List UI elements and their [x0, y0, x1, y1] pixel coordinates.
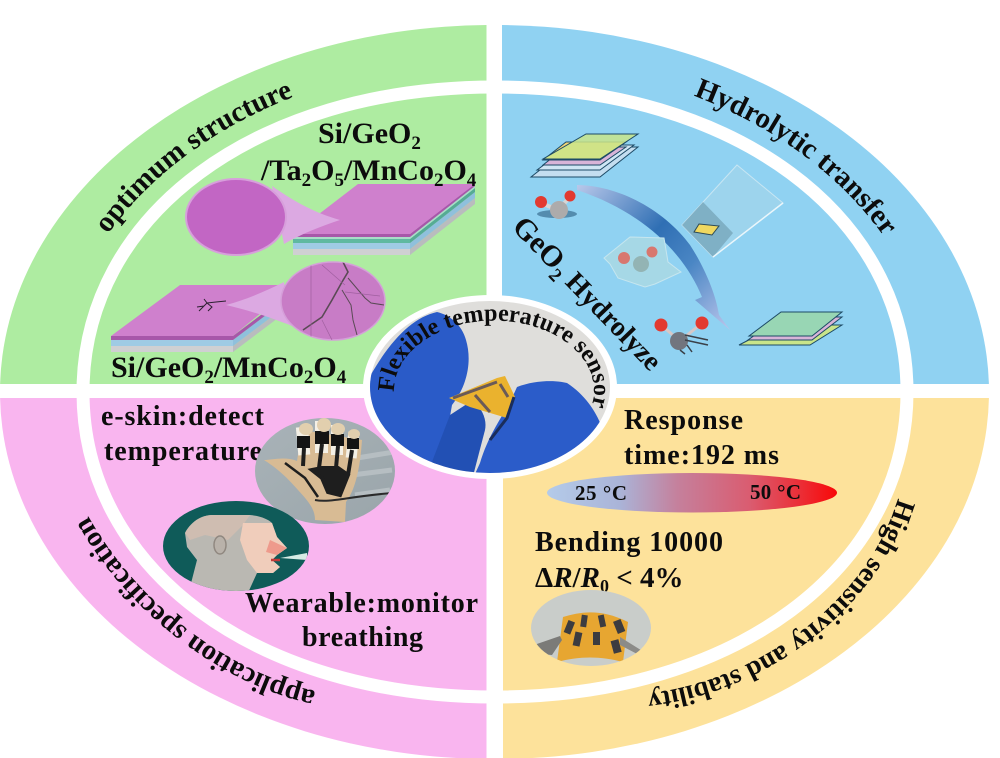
label: Si/GeO2/MnCo2O4: /MnCo	[213, 351, 304, 384]
label: wearable monitor breathing: Wearable:monitor	[245, 588, 478, 619]
label: wearable monitor breathing	[245, 588, 478, 653]
label: /Ta2O5/MnCo2O4: /Ta	[261, 154, 302, 187]
label: wearable monitor breathing: breathing	[302, 622, 423, 653]
arrow: hydrolysis process	[577, 185, 730, 330]
label: 50 °C: 50 °C	[750, 480, 801, 504]
illustration: wearable breathing head	[163, 501, 309, 595]
label: 25 °C: 25 °C	[575, 481, 627, 505]
illustration: intact surface magnifier	[186, 179, 340, 255]
illustration: cracked multilayer stack	[111, 285, 295, 352]
illustration: hydrolyzed molecule	[654, 316, 708, 354]
label: response time: Response	[624, 405, 743, 436]
label: Si/GeO2: 2	[411, 133, 421, 154]
label: e-skin detect temperature: temperature	[104, 436, 262, 467]
label: /Ta2O5/MnCo2O4: O	[443, 154, 467, 187]
label: /Ta2O5/MnCo2O4: 2	[434, 170, 443, 191]
illustration: dissolving ice cluster	[604, 237, 681, 287]
label: response time	[624, 405, 779, 471]
label: /Ta2O5/MnCo2O4: 2	[302, 170, 311, 191]
label: Si/GeO2/MnCo2O4: 2	[304, 367, 313, 388]
label: Si/GeO2: Si/GeO	[318, 117, 411, 150]
heading: hydrolytic transfer: Hydrolytic transfer	[694, 78, 895, 234]
label: bending cycles: Bending 10000	[535, 527, 723, 558]
illustration: beaker with sample in water	[682, 165, 783, 257]
label: /Ta2O5/MnCo2O4: 4	[467, 170, 477, 191]
illustration: flexible device before hydrolysis	[531, 134, 638, 177]
illustration: transferred device	[739, 312, 842, 345]
label: response time: time:192 ms	[624, 440, 779, 471]
photo: bent sensor with tweezers	[531, 590, 651, 666]
label: GeO2 Hydrolyze: GeO	[506, 210, 571, 276]
label: resistance change: < 4%	[609, 562, 683, 594]
illustration: intact multilayer stack	[293, 183, 475, 255]
label: GeO2 Hydrolyze: 2	[544, 265, 566, 286]
illustration: cracked surface magnifier	[226, 262, 385, 340]
heading: high sensitivity and stability: High sensitivity and stability	[648, 498, 915, 708]
label: /Ta2O5/MnCo2O4: 5	[334, 170, 344, 191]
temperature gradient bar	[547, 473, 837, 512]
label: resistance change: ΔR/R	[535, 562, 600, 594]
center: flexible temperature sensor photo	[363, 295, 617, 479]
illustration: GeO2 molecule	[535, 190, 577, 219]
label: /Ta2O5/MnCo2O4: O	[311, 154, 334, 187]
label: resistance change: 0	[600, 576, 609, 596]
label: Si/GeO2/MnCo2O4: Si/GeO	[111, 351, 204, 384]
label: e-skin detect temperature	[101, 401, 265, 467]
label: Si/GeO2/MnCo2O4: 4	[337, 367, 347, 388]
label: e-skin detect temperature: e-skin:detect	[101, 401, 265, 432]
label: Si/GeO2/MnCo2O4: O	[313, 351, 337, 384]
label: flexible temperature sensor: Flexible temperature sensor	[378, 309, 606, 408]
illustration: e-skin robotic hand	[255, 418, 395, 524]
label: Si/GeO2/MnCo2O4: 2	[204, 367, 214, 388]
label: GeO2 Hydrolyze: Hydrolyze	[554, 261, 667, 377]
heading: optimum structure: optimum structure	[100, 86, 292, 231]
heading: application specification: application specification	[78, 516, 314, 704]
label: /Ta2O5/MnCo2O4: /MnCo	[343, 154, 434, 187]
